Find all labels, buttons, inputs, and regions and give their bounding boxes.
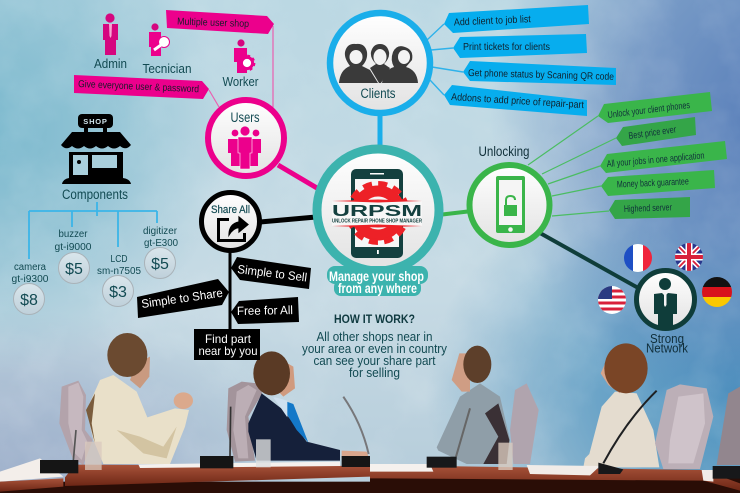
green callout: best price — [616, 117, 696, 146]
green callout: all your jobs: All your jobs in one application — [606, 150, 705, 170]
blue callout: add client: Add client to job list — [454, 14, 531, 28]
hub: share all — [202, 192, 260, 250]
component: buzzer: $5 — [65, 261, 83, 278]
text block: how it work: can see your share part — [314, 354, 436, 368]
man in navy suit — [248, 351, 368, 461]
table right — [370, 464, 740, 493]
component: lcd: LCD — [110, 254, 128, 265]
component: buzzer: buzzer — [58, 229, 88, 240]
black tag: free for all: Free for All — [237, 303, 293, 318]
icon: share — [218, 217, 248, 240]
component tree lines — [29, 202, 157, 259]
black tag: free for all — [231, 297, 299, 324]
people and table, left half — [0, 333, 370, 493]
label: strong network: Network — [646, 342, 689, 356]
role labels: Admin — [94, 56, 127, 71]
people and table, right half — [370, 343, 740, 493]
component: camera — [12, 262, 49, 314]
black tag: find part: near by you — [198, 344, 258, 358]
blue callout: print tickets: Print tickets for clients — [463, 42, 550, 53]
component: digitizer: $5 — [151, 256, 169, 273]
green callout: all your jobs — [600, 141, 727, 173]
black tag: simple to sell — [231, 257, 311, 289]
component: digitizer: digitizer — [143, 226, 178, 237]
black tag: simple to sell: Simple to Sell — [237, 262, 308, 285]
icon: red gear — [349, 184, 407, 242]
green callout: money back — [601, 170, 715, 196]
flag: United States — [598, 286, 626, 314]
hub: strong network — [636, 270, 694, 328]
man in cream jacket — [86, 333, 193, 464]
hub: clients — [330, 13, 430, 113]
icon: three people — [339, 44, 418, 83]
component: digitizer: gt-E300 — [144, 238, 178, 249]
role labels: Tecnician — [142, 61, 192, 76]
flag: Germany — [702, 277, 732, 307]
flag: United Kingdom — [675, 243, 703, 271]
wordmark: URPSM — [332, 203, 422, 220]
icon: shop — [61, 114, 131, 184]
black tag: simple to share: Simple to Share — [140, 286, 224, 311]
pink callout: passwords: Give everyone user & password — [78, 79, 199, 95]
icon: worker — [234, 39, 254, 73]
icon: admin — [103, 13, 118, 55]
component: camera: gt-i9300 — [12, 274, 49, 285]
blue callout: phone status — [463, 61, 616, 85]
hub: users — [208, 100, 284, 176]
tagline: manage your shop: from any where — [338, 281, 417, 296]
green callout: best price: Best price ever — [628, 124, 677, 142]
pink callout: passwords — [74, 75, 209, 99]
table left — [0, 458, 370, 493]
text block: how it work — [302, 314, 448, 380]
chair 2 — [227, 382, 262, 462]
green callout: unlock phones: Unlock your client phones — [607, 100, 691, 121]
icon: technician — [149, 23, 170, 56]
blue callout: add client — [444, 5, 589, 33]
tagline: manage your shop: Manage your shop — [329, 269, 424, 284]
label: strong network — [646, 332, 689, 356]
chair 3 — [510, 383, 539, 464]
pink callout: multiple user shop: Multiple user shop — [177, 17, 250, 30]
blue callout: addons: Addons to add price of repair-part — [451, 92, 584, 111]
text block: how it work: HOW IT WORK? — [334, 314, 415, 326]
heading: components: Components — [62, 187, 128, 202]
green callout: money back: Money back guarantee — [617, 176, 689, 190]
text block: how it work: All other shops near in — [316, 330, 433, 344]
component: buzzer: gt-i9000 — [54, 242, 92, 253]
hub: center logo URPSM — [317, 149, 439, 271]
blue callout: addons — [444, 85, 587, 116]
icon: businessman — [654, 278, 677, 328]
blue callout: phone status: Get phone status by Scaning QR code — [468, 68, 615, 83]
man in grey jacket — [437, 346, 510, 464]
chair 1 — [59, 381, 93, 465]
connector lines between hubs — [209, 24, 640, 330]
green callout: highend server: Highend server — [624, 202, 672, 215]
text block: how it work: for selling — [349, 366, 400, 380]
microphone — [343, 397, 369, 454]
component: buzzer — [54, 229, 92, 284]
flag: France — [624, 244, 653, 272]
label: share all: Share All — [211, 204, 250, 216]
logo band — [332, 200, 422, 228]
tagline: manage your shop — [327, 266, 428, 296]
component: camera: $8 — [20, 292, 38, 309]
role labels — [94, 56, 259, 89]
glass, microphones — [427, 391, 740, 479]
glasses and microphone bases — [40, 407, 370, 473]
icon: shop: SHOP — [83, 117, 108, 126]
role labels: Worker — [222, 74, 259, 89]
heading: unlocking: Unlocking — [478, 144, 530, 159]
component: camera: camera — [14, 262, 46, 273]
green callout: unlock phones — [598, 92, 712, 123]
chairs right — [655, 384, 740, 469]
green callout: highend server — [609, 197, 690, 219]
icon: unlocked phone — [496, 176, 525, 233]
blue callout: print tickets — [453, 34, 587, 58]
component: lcd: sm-n7505 — [97, 266, 141, 277]
component: lcd — [97, 254, 141, 306]
component: lcd: $3 — [109, 284, 127, 301]
pink role icons — [103, 13, 254, 73]
label: users: Users — [230, 110, 260, 125]
component: digitizer — [143, 226, 178, 278]
label: strong network: Strong — [650, 332, 684, 346]
text block: how it work: your area or even in country — [302, 342, 448, 356]
black tag: find part — [194, 329, 260, 360]
black tag: find part: Find part — [205, 332, 252, 346]
black tag: simple to share — [137, 279, 229, 318]
woman in cream blouse — [583, 343, 659, 467]
logo subtitle: UNLOCK REPAIR PHONE SHOP MANAGER — [332, 218, 422, 224]
icon: group — [228, 126, 261, 169]
icon: phone — [351, 169, 403, 258]
hub: unlocking — [470, 165, 550, 245]
label: clients: Clients — [360, 86, 396, 101]
pink callout: multiple user shop — [166, 10, 274, 34]
